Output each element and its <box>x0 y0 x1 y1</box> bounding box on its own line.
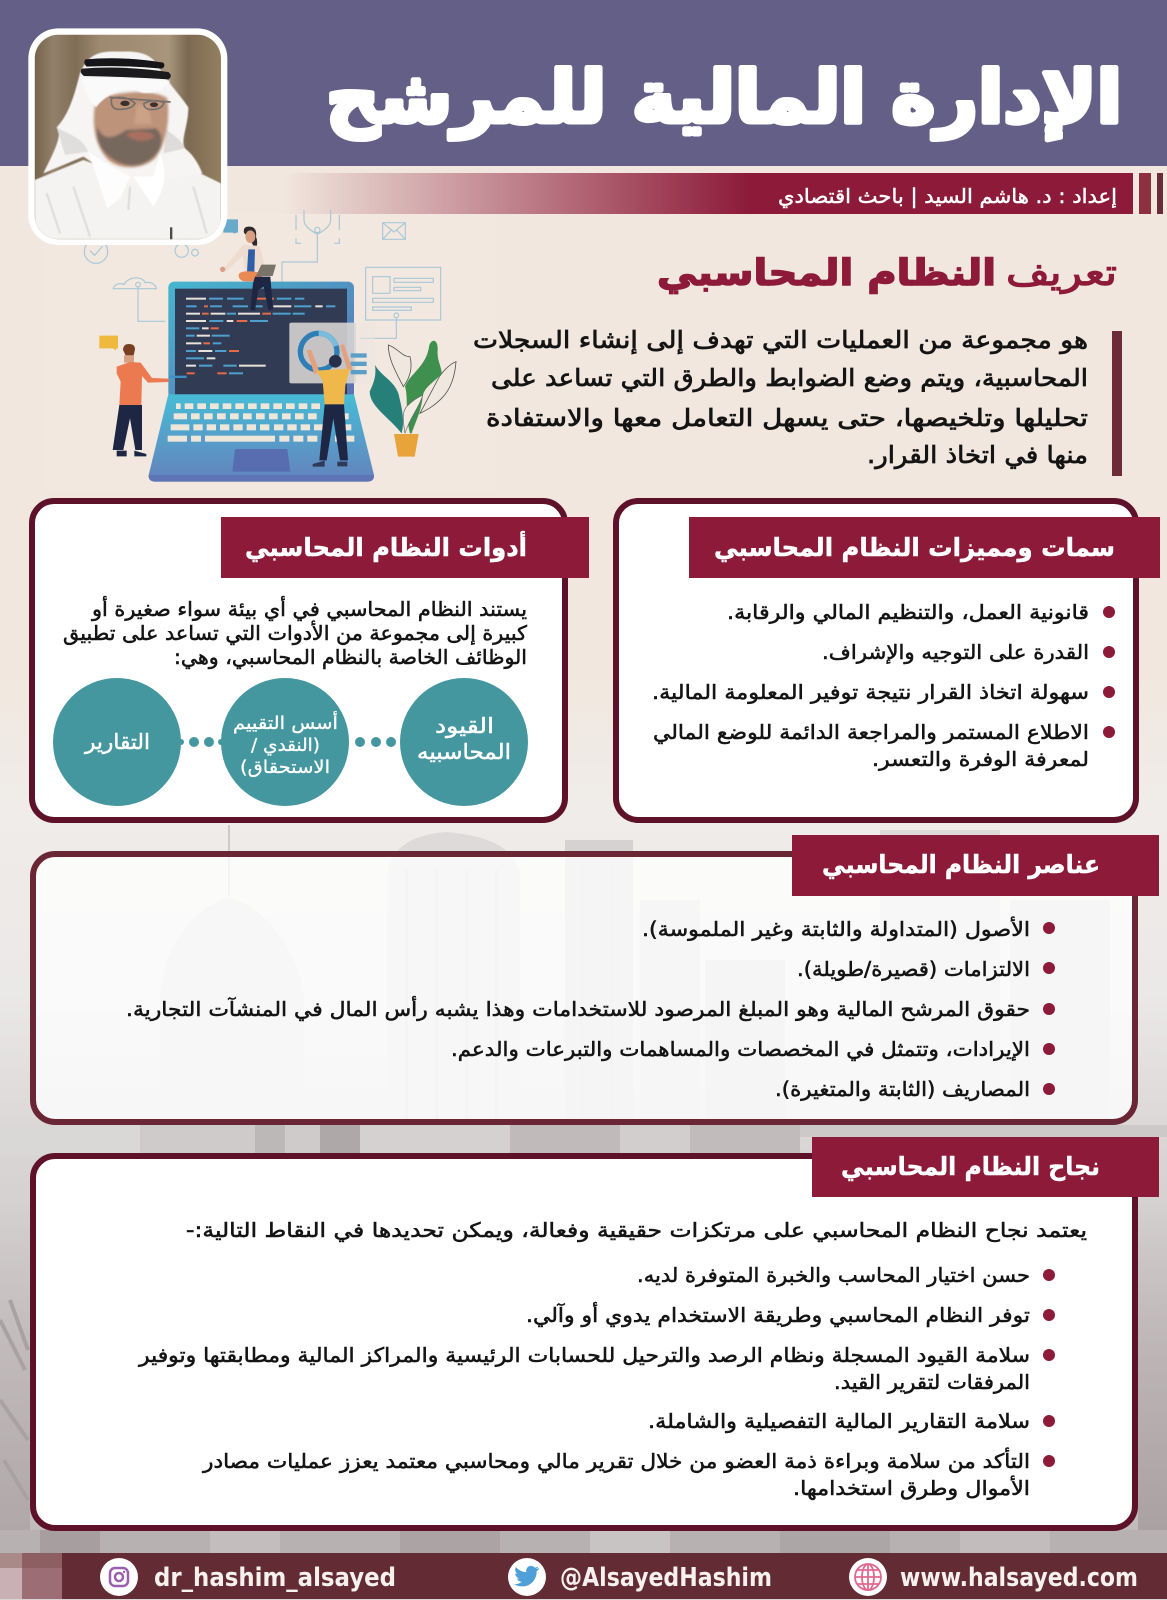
section heading: definition: النظام المحاسبي <box>657 253 996 294</box>
success list: توفر النظام المحاسبي وطريقة الاستخدام يدوي أو وآلي. <box>526 1302 1030 1328</box>
definition paragraph: تحليلها وتلخيصها، حتى يسهل التعامل معها والاستفادة <box>486 404 1088 432</box>
success list <box>138 1263 1055 1500</box>
icon: speech bubbles <box>223 219 238 234</box>
circle: accounting entries: المحاسبيه <box>417 740 511 764</box>
footer <box>0 1553 1167 1600</box>
success header <box>812 1137 1159 1197</box>
tools intro text: يستند النظام المحاسبي في أي بيئة سواء صغيرة أو <box>91 596 527 622</box>
tools header <box>221 517 589 578</box>
panel: elements <box>33 835 1159 1122</box>
success intro: يعتمد نجاح النظام المحاسبي على مرتكزات حقيقية وفعالة، ويمكن تحديدها في النقاط التالية:- <box>186 1218 1087 1243</box>
headcloth <box>43 51 202 183</box>
features list <box>652 600 1115 771</box>
author photo <box>28 28 227 245</box>
main title: الإدارة المالية للمرشح <box>326 55 1122 140</box>
success list: الأموال وطرق استخدامها. <box>793 1476 1030 1500</box>
definition paragraph: هو مجموعة من العمليات التي تهدف إلى إنشاء السجلات <box>473 326 1088 355</box>
author strip <box>283 173 1163 214</box>
tools intro text: الوظائف الخاصة بالنظام المحاسبي، وهي: <box>174 645 527 670</box>
definition paragraph: منها في اتخاذ القرار. <box>867 441 1088 469</box>
circle: valuation basis <box>221 678 349 806</box>
agal <box>84 58 164 69</box>
elements list: المصاريف (الثابتة والمتغيرة). <box>775 1077 1030 1101</box>
elements list: الأصول (المتداولة والثابتة وغير الملموسة). <box>642 917 1030 941</box>
person: man in yellow <box>307 344 353 467</box>
elements header: عناصر النظام المحاسبي <box>822 850 1100 880</box>
circle: valuation basis: أسس التقييم <box>233 711 338 734</box>
instagram handle: dr_hashim_alsayed <box>154 1563 396 1593</box>
panel: success <box>33 1137 1159 1528</box>
elements header <box>792 835 1159 896</box>
title band <box>0 0 1167 166</box>
elements list: الالتزامات (قصيرة/طويلة). <box>797 957 1030 981</box>
features header: سمات ومميزات النظام المحاسبي <box>714 533 1115 563</box>
icon: twitter <box>508 1558 546 1596</box>
keyboard keys <box>168 403 354 442</box>
connector dots <box>178 737 396 747</box>
chart overlay card <box>289 323 375 383</box>
elements list: حقوق المرشح المالية وهو المبلغ المرصود للاستخدامات وهذا يشبه رأس المال في المنشآت التجارية. <box>126 996 1030 1022</box>
circle: valuation basis: الاستحقاق) <box>240 757 330 778</box>
circle: accounting entries: القيود <box>435 714 494 738</box>
code lines <box>186 298 323 367</box>
tools intro text <box>63 596 527 670</box>
features list: قانونية العمل، والتنظيم المالي والرقابة. <box>727 600 1089 625</box>
section heading: definition <box>657 253 1117 294</box>
thobe <box>35 160 221 239</box>
collar <box>88 152 130 208</box>
elements list: الإيرادات، وتتمثل في المخصصات والمساهمات والتبرعات والدعم. <box>451 1037 1030 1062</box>
tools intro text: كبيرة إلى مجموعة من الأدوات التي تساعد على تطبيق <box>63 621 527 646</box>
features list: سهولة اتخاذ القرار نتيجة توفير المعلومة المالية. <box>652 680 1089 704</box>
success list: حسن اختيار المحاسب والخبرة المتوفرة لديه. <box>637 1263 1030 1287</box>
features list: القدرة على التوجيه والإشراف. <box>822 640 1089 664</box>
icon: globe <box>849 1558 887 1596</box>
definition paragraph: المحاسبية، ويتم وضع الضوابط والطرق التي تساعد على <box>491 364 1088 392</box>
laptop <box>149 282 374 482</box>
circle: valuation basis: (النقدي / <box>251 735 320 756</box>
forehead cloth edge <box>93 80 170 108</box>
elements list <box>126 917 1055 1101</box>
success list: سلامة القيود المسجلة ونظام الرصد والترحيل للحسابات الرئيسية والمراكز المالية ومطابقتها وتوفير <box>138 1343 1030 1367</box>
features list: الاطلاع المستمر والمراجعة الدائمة للوضع المالي <box>653 720 1089 745</box>
icon: instagram <box>100 1558 138 1596</box>
person: woman on laptop <box>220 227 276 311</box>
face <box>94 92 168 167</box>
success list: التأكد من سلامة وبراءة ذمة العضو من خلال تقرير مالي ومحاسبي معتمد يعزز عمليات مصادر <box>202 1447 1030 1474</box>
features header <box>689 517 1160 578</box>
panel: tools <box>32 501 589 820</box>
success list: سلامة التقارير المالية التفصيلية والشاملة. <box>648 1409 1030 1433</box>
panel: features <box>616 501 1160 820</box>
circle: accounting entries <box>400 678 528 806</box>
definition paragraph <box>473 326 1122 476</box>
icon: potted plant <box>370 341 456 457</box>
twitter handle: @AlsayedHashim <box>560 1563 772 1593</box>
person: man in orange <box>113 344 187 456</box>
circle: reports: التقارير <box>84 730 150 754</box>
icon: line icons <box>84 210 441 338</box>
features list: لمعرفة الوفرة والتعسر. <box>872 747 1089 771</box>
circle: reports <box>53 678 181 806</box>
author credit: إعداد : د. هاشم السيد | باحث اقتصادي <box>778 184 1117 209</box>
glasses <box>109 97 171 110</box>
success header: نجاح النظام المحاسبي <box>841 1152 1100 1181</box>
tools header: أدوات النظام المحاسبي <box>245 531 527 563</box>
success list: المرفقات لتقرير القيد. <box>834 1370 1030 1394</box>
illustration: laptop with people <box>84 210 456 482</box>
section heading: definition: تعريف <box>1006 253 1117 294</box>
